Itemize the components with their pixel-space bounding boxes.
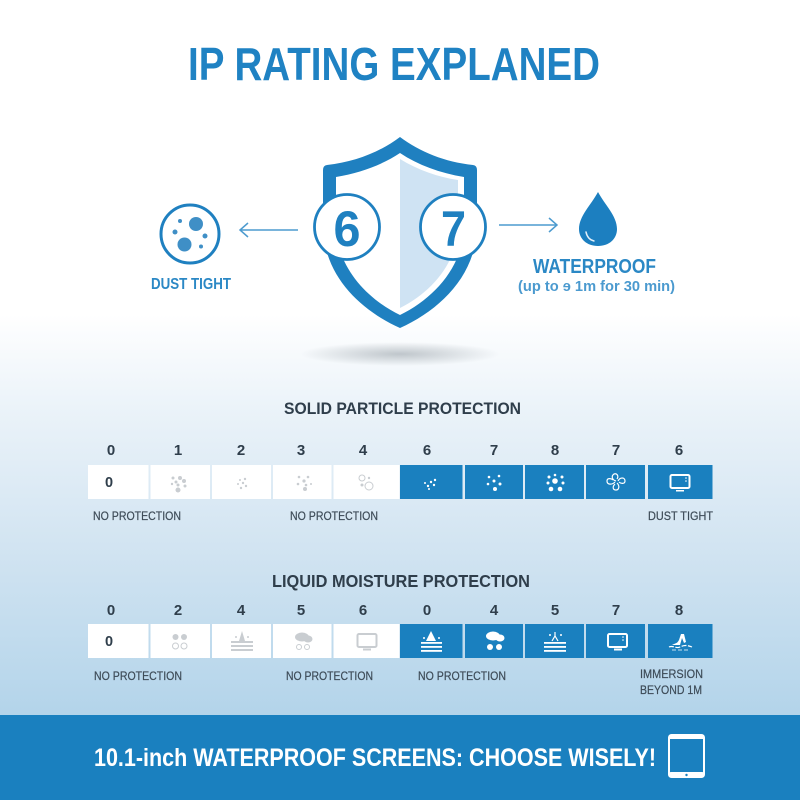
banner text: 10.1-inch WATERPROOF SCREENS: CHOOSE WISELY! xyxy=(94,744,656,772)
shield body xyxy=(323,137,477,328)
scale numbers: solid: 0 xyxy=(107,442,115,459)
panel: liquid moisture protection xyxy=(88,571,712,697)
scale numbers: solid: 2 xyxy=(237,442,245,459)
scale numbers: liquid: 0 xyxy=(423,602,431,619)
icons: gray particles xyxy=(171,475,373,492)
icons: gray liquid xyxy=(172,631,376,651)
captions: liquid: IMMERSION xyxy=(640,667,703,681)
rating digit 6: 6 xyxy=(334,201,360,257)
cell digit 0: 0 xyxy=(105,475,113,491)
rating digit 7: 7 xyxy=(441,201,466,257)
captions: liquid: NO PROTECTION xyxy=(286,669,373,683)
scale numbers: liquid: 5 xyxy=(297,602,305,619)
scale numbers: solid: 6 xyxy=(675,442,683,459)
captions: solid: NO PROTECTION xyxy=(93,509,181,523)
scale numbers: liquid: 4 xyxy=(490,602,499,619)
shield light half xyxy=(400,159,458,308)
label: waterproof: WATERPROOF xyxy=(533,256,656,278)
label: waterproof detail: (up to ɘ 1m for 30 min) xyxy=(518,279,675,295)
scale numbers: liquid: 2 xyxy=(174,602,182,619)
scale numbers: solid: 1 xyxy=(174,442,182,459)
white cells: liquid xyxy=(88,624,400,658)
shield graphic xyxy=(300,137,500,366)
rating digit 7 xyxy=(420,194,486,260)
title: IP RATING EXPLANED xyxy=(188,38,600,90)
blue cells: solid xyxy=(400,465,712,499)
scale numbers: liquid: 6 xyxy=(359,602,367,619)
heading: liquid: LIQUID MOISTURE PROTECTION xyxy=(272,571,530,591)
icon: dust xyxy=(161,205,219,263)
scale numbers: solid: 7 xyxy=(612,442,620,459)
scale numbers: solid: 3 xyxy=(297,442,305,459)
captions: solid: DUST TIGHT xyxy=(648,509,714,523)
white cells: solid xyxy=(88,465,400,499)
arrow: to dust xyxy=(240,223,298,237)
icons: white particles xyxy=(424,474,690,492)
shield shadow xyxy=(300,342,500,366)
scale numbers: solid: 6 xyxy=(423,442,431,459)
captions: liquid: NO PROTECTION xyxy=(418,669,506,683)
scale numbers: solid: 8 xyxy=(551,442,559,459)
scale numbers: liquid xyxy=(107,602,683,619)
scale numbers: liquid: 7 xyxy=(612,602,620,619)
scale numbers: solid: 7 xyxy=(490,442,498,459)
icons: white liquid xyxy=(421,631,692,652)
captions: solid: NO PROTECTION xyxy=(290,509,378,523)
scale numbers: solid: 4 xyxy=(359,442,368,459)
icon: water drop xyxy=(579,192,617,246)
scale numbers: liquid: 0 xyxy=(107,602,115,619)
scale numbers: liquid: 5 xyxy=(551,602,559,619)
blue cells: liquid xyxy=(400,624,712,658)
panel: solid particle protection xyxy=(88,399,714,523)
footer banner xyxy=(0,715,800,800)
captions: liquid xyxy=(94,667,703,697)
icon: tablet xyxy=(669,735,704,778)
captions: liquid: BEYOND 1M xyxy=(640,683,702,697)
scale numbers: liquid: 4 xyxy=(237,602,246,619)
shield inner xyxy=(336,153,464,315)
icon: fan xyxy=(607,474,625,490)
cell digit 0: 0 xyxy=(105,634,113,650)
captions: solid xyxy=(93,509,714,523)
captions: liquid: NO PROTECTION xyxy=(94,669,182,683)
label: dust tight: DUST TIGHT xyxy=(151,276,231,293)
rating digit 6 xyxy=(314,194,380,260)
scale numbers: liquid: 8 xyxy=(675,602,683,619)
scale numbers: solid xyxy=(107,442,683,459)
heading: solid: SOLID PARTICLE PROTECTION xyxy=(284,399,521,418)
arrow: to water xyxy=(499,218,557,232)
